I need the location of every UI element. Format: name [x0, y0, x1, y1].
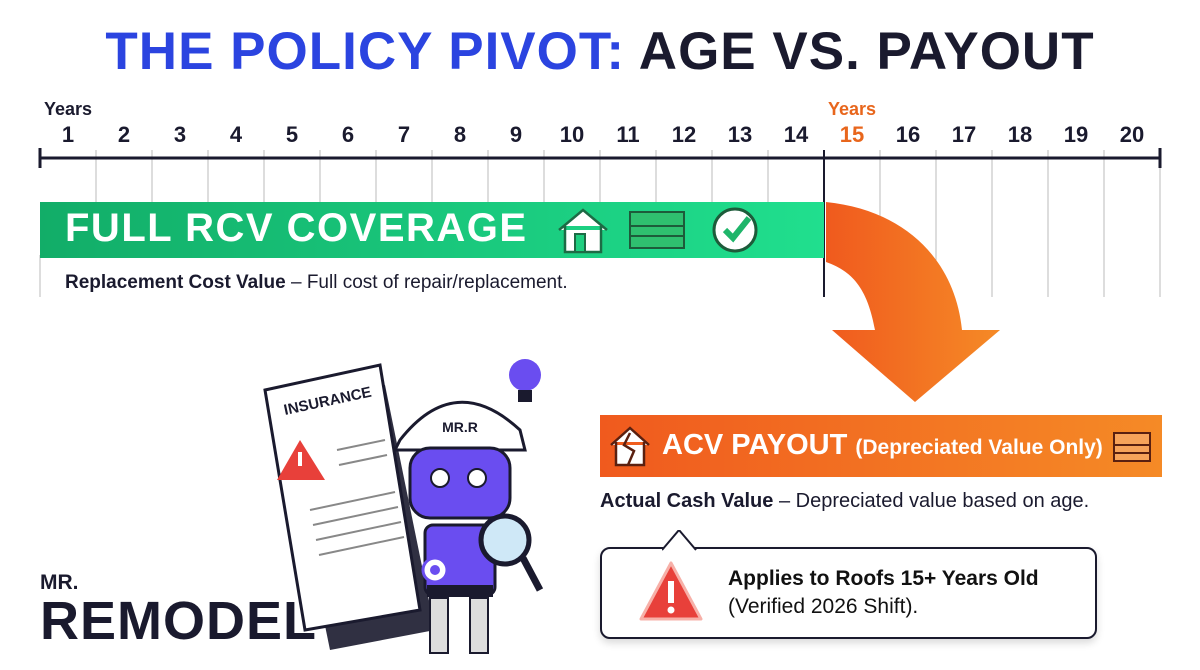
green bar [40, 202, 824, 258]
callout text: (Verified 2026 Shift). [728, 595, 918, 618]
bar label: FULL RCV COVERAGE [65, 206, 528, 250]
ACV bar [600, 415, 1162, 477]
timeline: Years [828, 99, 876, 119]
ACV label: ACV PAYOUT (Depreciated Value Only) [662, 429, 1103, 461]
timeline: 5 [286, 122, 298, 147]
logo: MR. [40, 571, 78, 594]
RCV description: Replacement Cost Value – Full cost of repair/replacement. [65, 272, 568, 293]
timeline: 19 [1064, 122, 1088, 147]
title: THE POLICY PIVOT: AGE VS. PAYOUT [105, 22, 1095, 81]
timeline: 1 [62, 122, 74, 147]
arrow: curved orange [826, 202, 1000, 402]
timeline: 17 [952, 122, 976, 147]
mascot illustration [263, 359, 544, 654]
timeline: 12 [672, 122, 696, 147]
ACV description: Actual Cash Value – Depreciated value based on age. [600, 490, 1089, 512]
callout [600, 547, 1097, 639]
timeline: 15 [840, 122, 864, 147]
timeline: 16 [896, 122, 920, 147]
logo: REMODEL [40, 591, 317, 651]
timeline: 20 [1120, 122, 1144, 147]
callout text [728, 567, 1039, 618]
callout pointer [662, 530, 697, 551]
document [265, 365, 435, 650]
robot: MR.R [442, 419, 478, 435]
robot [395, 359, 541, 653]
timeline: 3 [174, 122, 186, 147]
timeline: 10 [560, 122, 584, 147]
timeline: 14 [784, 122, 809, 147]
timeline: 4 [230, 122, 243, 147]
timeline: Years [44, 99, 92, 119]
timeline: 9 [510, 122, 522, 147]
icon: money stack [1113, 432, 1151, 462]
timeline: 7 [398, 122, 410, 147]
icon: broken house [610, 426, 650, 466]
timeline: 8 [454, 122, 466, 147]
callout text: Applies to Roofs 15+ Years Old [728, 567, 1039, 590]
timeline: 2 [118, 122, 130, 147]
timeline: 11 [616, 122, 640, 147]
timeline: 6 [342, 122, 354, 147]
timeline: 13 [728, 122, 752, 147]
timeline: 18 [1008, 122, 1032, 147]
document: INSURANCE [282, 384, 373, 419]
icon: warning [640, 561, 702, 620]
icons: house money check [558, 208, 758, 254]
